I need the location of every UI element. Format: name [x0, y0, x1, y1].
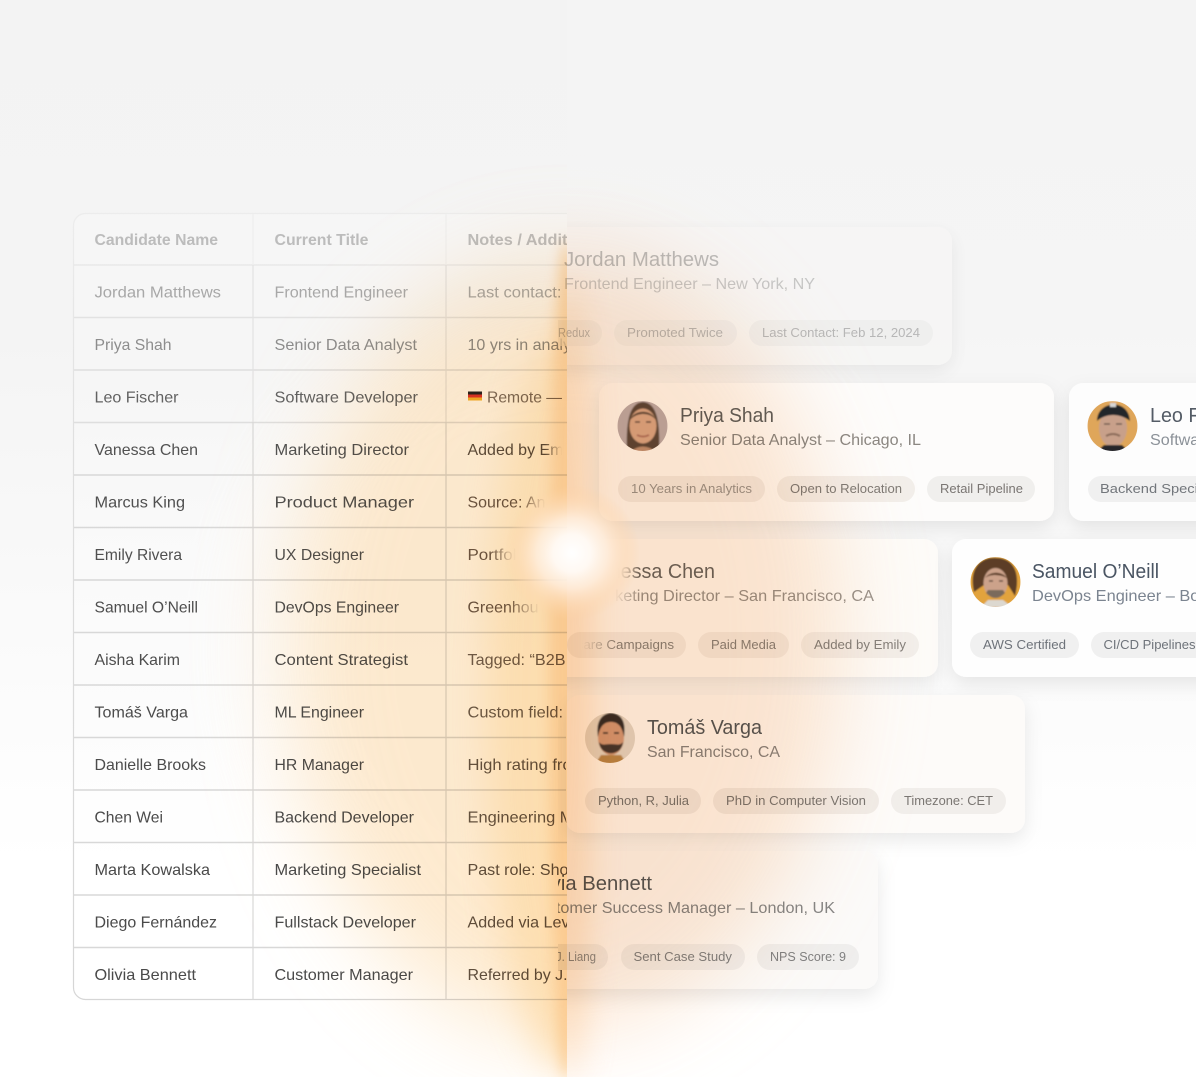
row: Samuel O'Neill: DevOps Engineer — [274, 600, 400, 616]
table header row: Notes / Additional — [468, 232, 606, 249]
row: Marcus King — [96, 496, 544, 511]
row: Vanessa Chen: Vanessa Chen — [94, 442, 198, 459]
row: Chen Wei: Backend Developer — [274, 810, 415, 826]
row: Marcus King: Marcus King — [94, 494, 185, 512]
card: Olivia Bennett: Sent Case Study — [634, 949, 732, 964]
row: Jordan Matthews: Frontend Engineer — [274, 284, 409, 302]
card: Olivia Bennett: NPS Score: 9 — [770, 949, 846, 964]
card: Samuel O'Neill — [952, 539, 1196, 677]
card: Tomáš Varga: Tomáš Varga — [647, 717, 763, 739]
row: Olivia Bennett: Olivia Bennett — [94, 967, 197, 984]
row: Emily Rivera: UX Designer — [274, 547, 365, 564]
card: Tomáš Varga — [566, 695, 1025, 833]
card: Priya Shah — [599, 383, 1054, 521]
row: Aisha Karim: Content Strategist — [274, 652, 409, 669]
card: Olivia Bennett — [558, 869, 880, 998]
row: Emily Rivera: Portfol — [468, 547, 516, 564]
row: Marta Kowalska — [96, 864, 567, 878]
card: Vanessa Chen — [567, 557, 940, 686]
row: Emily Rivera — [96, 548, 512, 564]
row: Jordan Matthews: Last contact: — [468, 284, 562, 302]
row: Aisha Karim — [94, 654, 565, 668]
table frame — [73, 222, 567, 1000]
row: Vanessa Chen — [94, 444, 561, 458]
card: Priya Shah: Senior Data Analyst – Chicago, IL — [680, 432, 921, 449]
row: Samuel O'Neill: Samuel O’Neill — [94, 600, 198, 616]
row: Jordan Matthews — [94, 286, 560, 301]
panel: candidate cards — [558, 251, 1196, 998]
row: Aisha Karim: Aisha Karim — [94, 652, 180, 669]
row: Priya Shah: Priya Shah — [94, 337, 172, 354]
row: Tomáš Varga — [94, 706, 562, 721]
glow: white bloom behind table — [247, 320, 887, 980]
table header row: Current Title — [274, 232, 369, 249]
row: Vanessa Chen: Marketing Director — [274, 442, 410, 459]
row: Leo Fischer: Remote — — [487, 390, 562, 406]
card: Olivia Bennett: Customer Success Manager – London, UK — [527, 900, 835, 917]
row: Chen Wei: Engineering M — [468, 810, 574, 826]
bottom edge strip — [0, 1077, 1196, 1080]
card: Jordan Matthews: React, Redux — [523, 325, 590, 340]
panel: right side veil — [567, 0, 1196, 1080]
row: Marta Kowalska: Marketing Specialist — [274, 862, 422, 879]
row: Priya Shah — [96, 338, 567, 354]
row: Olivia Bennett: Customer Manager — [274, 967, 414, 984]
card: Jordan Matthews: Jordan Matthews — [564, 249, 719, 271]
row: Danielle Brooks: HR Manager — [274, 757, 365, 774]
card: Tomáš Varga: PhD in Computer Vision — [726, 793, 866, 808]
row: Marta Kowalska: Past role: Sho — [468, 862, 569, 879]
card: Olivia Bennett: Referred: J. Liang — [505, 949, 596, 964]
glow: table side — [247, 222, 567, 1077]
card: Tomáš Varga: San Francisco, CA — [647, 744, 780, 761]
row: Olivia Bennett — [95, 968, 566, 984]
row: Vanessa Chen: Added by Em — [468, 442, 564, 459]
row: Marcus King: Product Manager — [274, 494, 415, 512]
row: Aisha Karim: Tagged: “B2B — [468, 652, 566, 669]
card: Vanessa Chen: Added by Emily — [814, 637, 907, 652]
row: Chen Wei: Chen Wei — [94, 810, 163, 826]
avatar: Samuel O'Neill — [970, 557, 1021, 608]
card: Vanessa Chen: Marketing Director – San Francisco, CA — [587, 588, 874, 605]
row: Samuel O'Neill: Greenhou — [468, 600, 538, 616]
row: Danielle Brooks: High rating from — [468, 757, 586, 774]
card: Leo Fischer — [1069, 383, 1196, 521]
row: Danielle Brooks — [96, 758, 566, 774]
avatar: Tomáš Varga — [584, 712, 636, 764]
card: Priya Shah: Open to Relocation — [790, 481, 902, 496]
card: Vanessa Chen: Vanessa Chen — [587, 561, 715, 583]
row: Samuel O'Neill — [95, 601, 538, 616]
row: Diego Fernández: Added via Lev — [468, 914, 570, 932]
row: Priya Shah: Senior Data Analyst — [274, 337, 418, 354]
row: Jordan Matthews: Jordan Matthews — [94, 284, 221, 302]
row: Diego Fernández — [96, 916, 567, 931]
row: Leo Fischer — [96, 391, 562, 406]
table header row — [95, 234, 567, 246]
card: Tomáš Varga: Timezone: CET — [904, 793, 993, 808]
row: Danielle Brooks: Danielle Brooks — [94, 757, 206, 774]
row: Priya Shah: 10 yrs in analyst — [468, 337, 584, 354]
card: Jordan Matthews: Last Contact: Feb 12, 2024 — [762, 325, 920, 340]
row: Tomáš Varga: Tomáš Varga — [94, 704, 188, 722]
card: Olivia Bennett: Olivia Bennett — [526, 873, 652, 895]
row: Diego Fernández: Fullstack Developer — [274, 914, 417, 932]
card: Priya Shah: Retail Pipeline — [940, 481, 1023, 496]
card: Samuel O'Neill: Samuel O’Neill — [1032, 561, 1159, 583]
card: Jordan Matthews: Promoted Twice — [627, 325, 723, 340]
row: Marta Kowalska: Marta Kowalska — [94, 862, 210, 879]
avatar: Leo Fischer — [1087, 401, 1138, 452]
card: Vanessa Chen: Paid Media — [711, 637, 777, 652]
row: Tomáš Varga: Custom field: — [468, 704, 563, 722]
card: Tomáš Varga: Python, R, Julia — [598, 793, 690, 808]
icon: German flag — [468, 392, 482, 400]
row: Chen Wei — [95, 811, 566, 826]
row: Marcus King: Source: An — [468, 494, 546, 512]
row: Olivia Bennett: Referred by J. — [468, 967, 568, 984]
panel: spreadsheet table — [73, 222, 567, 1000]
card: Samuel O'Neill: CI/CD Pipelines — [1104, 637, 1196, 652]
card: Jordan Matthews — [558, 251, 946, 370]
card: Jordan Matthews: Frontend Engineer – New York, NY — [564, 276, 815, 293]
glow: white light core — [504, 485, 640, 621]
card: Priya Shah: 10 Years in Analytics — [631, 481, 753, 496]
row: Emily Rivera: Emily Rivera — [94, 547, 182, 564]
card: Vanessa Chen: Healthcare Campaigns — [538, 637, 675, 652]
row: Diego Fernández: Diego Fernández — [94, 914, 217, 932]
card: Priya Shah: Priya Shah — [680, 405, 774, 427]
row: Leo Fischer: Software Developer — [274, 390, 419, 406]
avatar: Priya Shah — [617, 401, 668, 452]
row: Leo Fischer: Leo Fischer — [94, 390, 179, 406]
row: Tomáš Varga: ML Engineer — [274, 704, 365, 722]
glow: card side — [567, 215, 875, 1077]
table header row: Candidate Name — [94, 232, 218, 249]
card: Samuel O'Neill: AWS Certified — [983, 637, 1066, 652]
